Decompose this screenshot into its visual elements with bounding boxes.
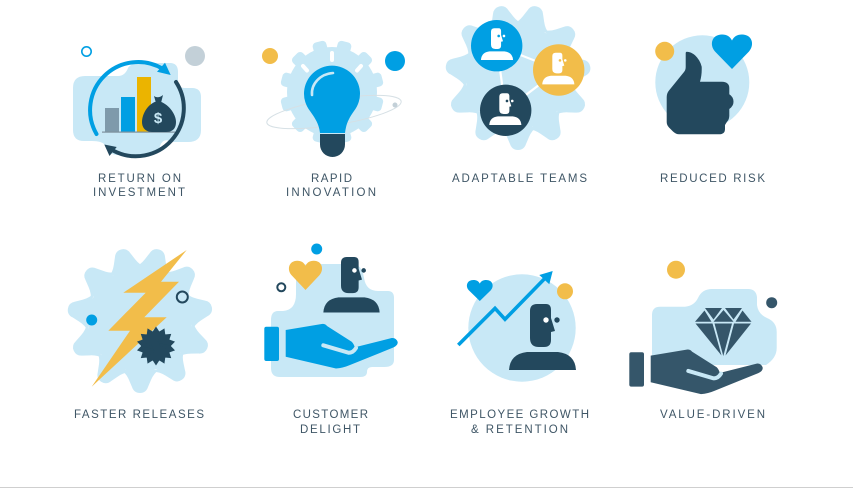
arrow: blue cycle [90,62,171,134]
label [93,173,185,199]
panel: reduced risk [655,34,765,185]
background gear [280,40,384,144]
icon: person [509,304,576,370]
label: VALUE-DRIVEN [660,409,765,421]
background circle [468,274,576,382]
icon: heart [467,280,493,301]
icon: money bag: $ [154,110,163,127]
background blob [652,289,777,365]
arrow: growth line [458,271,553,345]
icon: open hand [264,324,398,368]
background gear [65,245,215,393]
label [450,409,589,436]
icon: diamond [695,308,752,356]
panel: employee growth and retention [450,271,589,436]
dark dot [766,297,777,308]
ring decoration [82,47,91,56]
icon: dark cog [136,326,176,366]
label: ADAPTABLE TEAMS [452,173,587,185]
label [293,409,368,436]
ring decoration [177,292,188,302]
label: CUSTOMER [293,409,368,421]
panel: adaptable teams [443,2,593,185]
yellow dot [655,42,674,61]
team member: yellow [533,44,584,96]
panel: customer delight [264,244,398,436]
team member: blue [471,20,522,71]
label: DELIGHT [300,424,360,436]
label: & RETENTION [471,424,568,436]
blue dot [311,244,322,254]
orbit [265,89,403,135]
label: EMPLOYEE GROWTH [450,409,589,421]
panel: return on investment [73,46,205,199]
label: REDUCED RISK [660,173,765,185]
arrow: dark cycle [104,82,184,156]
icon: person [323,257,380,312]
icon: heart [712,34,752,69]
background blob [73,63,201,155]
label: FASTER RELEASES [74,409,204,421]
background blob [271,264,394,377]
background circle [655,35,749,129]
icon: money bag [142,95,176,132]
label: RAPID [311,173,352,185]
team member: dark [480,85,531,136]
icon: lightning bolt [92,250,187,387]
panel: value-driven [629,261,777,421]
icon: heart [289,261,322,290]
background gear [443,2,593,150]
blue dot [86,314,97,326]
panel: faster releases [65,245,215,421]
icon: thumbs up [667,52,734,134]
yellow dot [262,48,278,64]
label: INVESTMENT [93,187,185,199]
yellow dot [667,261,685,279]
label [286,173,376,199]
label: RETURN ON [98,173,181,185]
label: INNOVATION [286,187,376,199]
blue dot [385,51,405,71]
gray dot [185,46,205,66]
icon: light bulb [304,66,360,157]
ring decoration [277,283,285,291]
light rays [303,53,361,70]
panel: rapid innovation [262,40,405,199]
yellow dot [557,283,573,299]
connectors [497,46,559,110]
icon: open hand [629,350,763,394]
bar chart [102,77,175,133]
